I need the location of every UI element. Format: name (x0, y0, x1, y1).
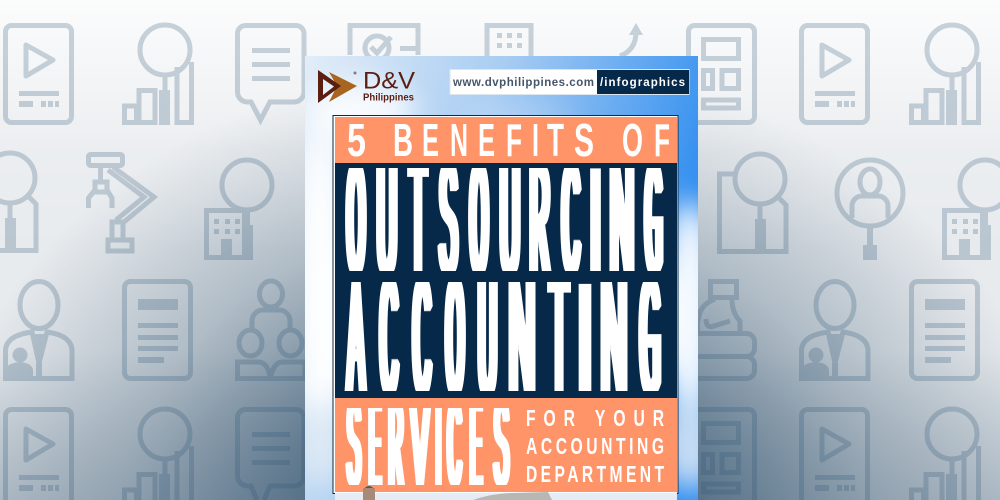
heading text (347, 114, 670, 166)
icon: video document (6, 26, 72, 122)
title word: accounting: A (347, 250, 365, 447)
icon: group of people (238, 281, 305, 378)
icon: magnifier chart (124, 25, 192, 125)
icon: magnifier building (206, 160, 272, 260)
heading text: S (574, 114, 594, 166)
icon: growth arrow (620, 23, 643, 56)
title word: outsourcing (345, 168, 664, 271)
subtitle line: for your: FOR YOUR (526, 406, 664, 432)
poster panel: G (645, 136, 662, 323)
subtitle line: accounting: ACCOUNTING (526, 434, 664, 460)
navy title band (335, 163, 677, 398)
heading text: F (654, 114, 670, 166)
heading text: N (450, 114, 468, 166)
icon: magnifier chart bottom (124, 409, 192, 500)
photo strip (335, 486, 677, 500)
website path: /infographics (600, 77, 685, 89)
title word: accounting: U (478, 250, 497, 447)
title word: outsourcing: U (377, 136, 397, 323)
title word: accounting (344, 282, 662, 391)
title word: outsourcing: I (588, 136, 602, 306)
heading text: F (506, 114, 522, 166)
title word: accounting: N (508, 250, 536, 447)
icon: robot arm (88, 154, 154, 251)
title word: accounting: N (600, 250, 628, 447)
icon: document (124, 282, 190, 378)
icon: speech bubble bottom (238, 410, 304, 500)
icon: magnifier chart bottom right (912, 409, 978, 500)
icon: building (487, 26, 531, 56)
icon: document right (912, 282, 978, 378)
website url: www.dvphilippines.com (452, 77, 594, 89)
title word: accounting: O (446, 250, 464, 447)
icon: layout document bottom (688, 410, 754, 500)
icon: magnifier document right (720, 154, 786, 252)
heading text: T (547, 114, 564, 166)
title word: accounting: C (412, 250, 432, 447)
icon: layout document (688, 26, 754, 122)
title word: outsourcing: N (609, 136, 635, 323)
icon: check document (350, 26, 420, 60)
title block frame (333, 116, 678, 494)
icon: video document bottom (6, 410, 72, 500)
heading band: 5 benefits of (335, 114, 677, 166)
title word: outsourcing: C (562, 136, 580, 323)
icon: businessman (5, 282, 72, 381)
icon: video document right (802, 26, 868, 122)
heading text: B (393, 114, 413, 166)
heading text: E (478, 114, 495, 166)
title word: accounting: C (380, 250, 398, 447)
title word: outsourcing: S (439, 136, 458, 323)
icon: magnifier person (837, 160, 903, 260)
heading text: I (532, 114, 539, 166)
heading text: O (622, 114, 643, 166)
heading text: 5 (347, 114, 366, 166)
icon: video document bottom right (802, 410, 868, 500)
logo subtitle: Philippines (363, 92, 414, 104)
figure: man head (363, 486, 375, 500)
title word: outsourcing: U (500, 136, 520, 323)
icon: magnifier document left (0, 153, 36, 251)
heading text: E (422, 114, 439, 166)
title word: accounting: I (575, 249, 595, 428)
title word: outsourcing: O (346, 136, 366, 323)
icon: speech bubble (238, 26, 304, 120)
title word: accounting: T (549, 250, 569, 447)
logo (318, 68, 415, 104)
icon: hand on stack (688, 282, 754, 378)
title word: services (345, 408, 510, 485)
icon: magnifier building right (944, 160, 1000, 260)
figure: aircraft fuselage (473, 492, 552, 500)
subtitle band (335, 398, 677, 492)
icon: magnifier chart right (912, 25, 978, 125)
title word: outsourcing: T (409, 136, 427, 323)
title word: outsourcing: O (470, 136, 488, 323)
website address bar (450, 70, 689, 94)
title word: outsourcing: R (529, 136, 550, 323)
poster panel (290, 56, 720, 500)
icon: businessman right (801, 282, 868, 381)
sky background (290, 56, 720, 500)
subtitle line: department: DEPARTMENT (526, 462, 664, 488)
poster panel: G (639, 250, 661, 447)
icon: logo arrows (318, 70, 357, 103)
logo wordmark: D&V (363, 68, 415, 94)
